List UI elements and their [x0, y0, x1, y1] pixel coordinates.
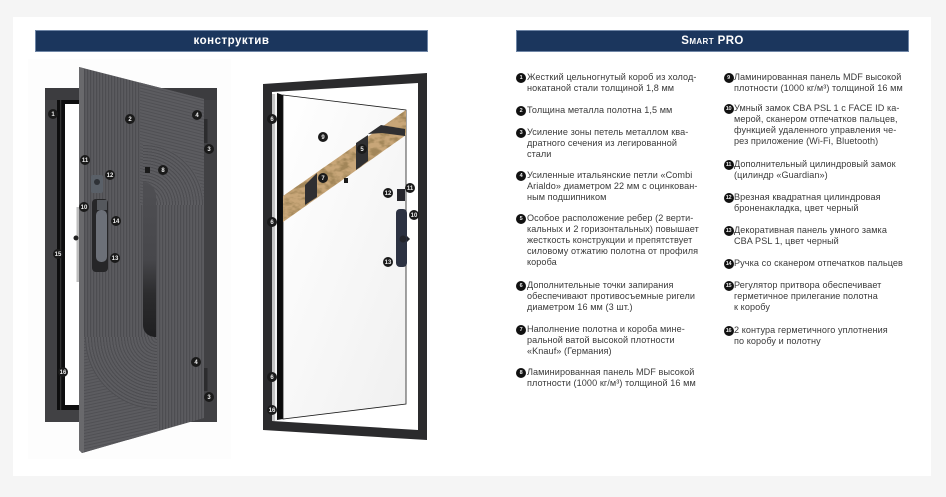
spec item 15: к коробу	[734, 302, 770, 312]
spec item 4: ным подшипником	[527, 192, 606, 202]
left door callouts: 3	[207, 395, 211, 401]
spec item 1: нокатаной стали толщиной 1,8 мм	[527, 83, 674, 93]
door frame	[45, 88, 217, 422]
left door callouts: 4	[194, 360, 198, 366]
spec item 7	[516, 324, 685, 356]
spec item 14: Ручка со сканером отпечатков пальцев	[734, 258, 903, 268]
spec item 5: Особое расположение ребер (2 верти-	[527, 213, 693, 223]
smart lock handle	[74, 199, 108, 272]
cutaway with mineral wool	[280, 108, 410, 224]
spec item 10: мерой, сканером отпечатков пальцев,	[734, 114, 898, 124]
text: 5	[520, 216, 522, 222]
text: 13	[726, 228, 731, 234]
text: 1	[520, 74, 522, 80]
spec item 3: стали	[527, 149, 551, 159]
spec item 9: Ламинированная панель MDF высокой	[734, 72, 901, 82]
right door callouts: 12	[385, 191, 392, 197]
text: 2	[520, 108, 522, 114]
right door callouts: 5	[360, 147, 364, 153]
lock plate	[91, 175, 103, 193]
spec item 6: диаметром 16 мм (3 шт.)	[527, 302, 633, 312]
spec item 13: CBA PSL 1, цвет черный	[734, 236, 839, 246]
spec item 8: Ламинированная панель MDF высокой	[527, 367, 694, 377]
spec item 15: герметичное прилегание полотна	[734, 291, 878, 301]
right door callouts: 13	[385, 260, 392, 266]
spec item 3: Усиление зоны петель металлом ква-	[527, 127, 688, 137]
right door callouts: 6	[270, 220, 274, 226]
spec item 13: Декоративная панель умного замка	[734, 225, 887, 235]
spec item 10: функцией удаленного управления че-	[734, 125, 896, 135]
spec item 4: Arialdo» диаметром 22 мм с оцинкован-	[527, 181, 697, 191]
left door callouts: 1	[51, 112, 55, 118]
left door callouts: 14	[113, 219, 120, 225]
right door callouts	[267, 114, 419, 415]
spec item 7: Наполнение полотна и короба мине-	[527, 324, 685, 334]
heading: Smart PRO	[516, 30, 909, 52]
left door callouts: 16	[60, 370, 67, 376]
spec item 10: Умный замок CBA PSL 1 с FACE ID ка-	[734, 103, 900, 113]
spec item 16: по коробу и полотну	[734, 336, 821, 346]
spec item 1: Жесткий цельногнутый короб из холод-	[527, 72, 696, 82]
spec item 5	[516, 213, 699, 267]
lock plate	[397, 189, 405, 201]
text: 4	[520, 172, 522, 178]
spy hole	[145, 167, 150, 173]
spec item 9	[724, 72, 903, 93]
spy hole	[344, 178, 348, 183]
left door callouts: 11	[82, 158, 89, 164]
spec item 7: ральной ватой высокой плотности	[527, 335, 675, 345]
spec item 1	[516, 72, 696, 93]
right door callouts: 11	[407, 186, 414, 192]
spec item 3: дратного сечения из легированной	[527, 138, 677, 148]
left door callouts: 4	[195, 113, 199, 119]
text: 10	[726, 106, 731, 112]
spec item 9: плотности (1000 кг/м³) толщиной 16 мм	[734, 83, 903, 93]
seal strip	[272, 94, 275, 421]
spec item 16	[724, 325, 888, 346]
left door callouts: 8	[161, 168, 165, 174]
text: 8	[520, 370, 522, 376]
right door: inside view	[263, 73, 427, 440]
spec item 10: рез приложение (Wi-Fi, Bluetooth)	[734, 136, 878, 146]
locking bar	[76, 207, 79, 282]
right door callouts: 16	[269, 408, 276, 414]
leaf edge	[277, 93, 283, 420]
hinges	[204, 119, 208, 391]
spec item 8: плотности (1000 кг/м³) толщиной 16 мм	[527, 378, 696, 388]
spec item 5: жесткость конструкции и препятствует	[527, 235, 692, 245]
spec item 15	[724, 280, 882, 312]
left door callouts: 15	[55, 252, 62, 258]
right door callouts: 6	[270, 117, 274, 123]
glass insert	[143, 182, 156, 337]
spec item 11	[724, 159, 896, 180]
spec item 5: силовому отжатию полотна от профиля	[527, 246, 698, 256]
spec item 3	[516, 127, 688, 159]
text: 14	[726, 260, 731, 266]
spec item 16: 2 контура герметичного уплотнения	[734, 325, 888, 335]
left door callouts: 3	[207, 147, 211, 153]
heading: конструктив: конструктив	[194, 35, 269, 47]
heading: Smart PRO: Smart PRO	[681, 35, 744, 47]
text: 7	[520, 326, 522, 332]
frame	[263, 73, 427, 440]
door illustrations	[45, 67, 427, 453]
spec item 6: обеспечивают противосъемные ригели	[527, 291, 695, 301]
spec item 7: «Knauf» (Германия)	[527, 346, 612, 356]
spec item 6	[516, 280, 695, 312]
spec item 6: Дополнительные точки запирания	[527, 280, 674, 290]
steel ribs	[305, 125, 405, 205]
right door callouts: 9	[321, 135, 325, 141]
spec item 5: кальных и 2 горизонтальных) повышает	[527, 224, 699, 234]
spec item 4: Усиленные итальянские петли «Combi	[527, 170, 692, 180]
text: 3	[520, 130, 522, 136]
left door callouts: 10	[81, 205, 88, 211]
right door callouts: 7	[321, 176, 325, 182]
spec item 10	[724, 103, 900, 146]
text: 9	[727, 74, 730, 80]
text: 12	[726, 194, 731, 200]
text: 11	[726, 162, 731, 168]
spec item 4	[516, 170, 697, 202]
door leaf with grooves	[79, 60, 210, 462]
right door callouts: 10	[411, 213, 418, 219]
spec item 8	[516, 367, 696, 388]
spec item 11: (цилиндр «Guardian»)	[734, 170, 828, 180]
spec item 11: Дополнительный цилиндровый замок	[734, 159, 896, 169]
white panel	[283, 95, 406, 419]
heading: конструктив	[35, 30, 428, 52]
spec item 15: Регулятор притвора обеспечивает	[734, 280, 881, 290]
text: 15	[726, 282, 731, 288]
spec item 2: Толщина металла полотна 1,5 мм	[527, 105, 672, 115]
spec item 12: броненакладка, цвет черный	[734, 203, 858, 213]
left door callouts: 13	[112, 256, 119, 262]
lock panel with knob	[396, 209, 410, 267]
right door callouts: 6	[270, 375, 274, 381]
spec item 5: короба	[527, 257, 557, 267]
spec item 12: Врезная квадратная цилиндровая	[734, 192, 881, 202]
text: 16	[726, 328, 731, 334]
spec item 13	[724, 225, 887, 246]
left door callouts: 2	[128, 117, 132, 123]
left door callouts: 12	[107, 173, 114, 179]
left door callouts	[48, 109, 214, 402]
left door: outside view	[45, 67, 217, 453]
spec item 12	[724, 192, 881, 213]
text: 6	[520, 282, 522, 288]
